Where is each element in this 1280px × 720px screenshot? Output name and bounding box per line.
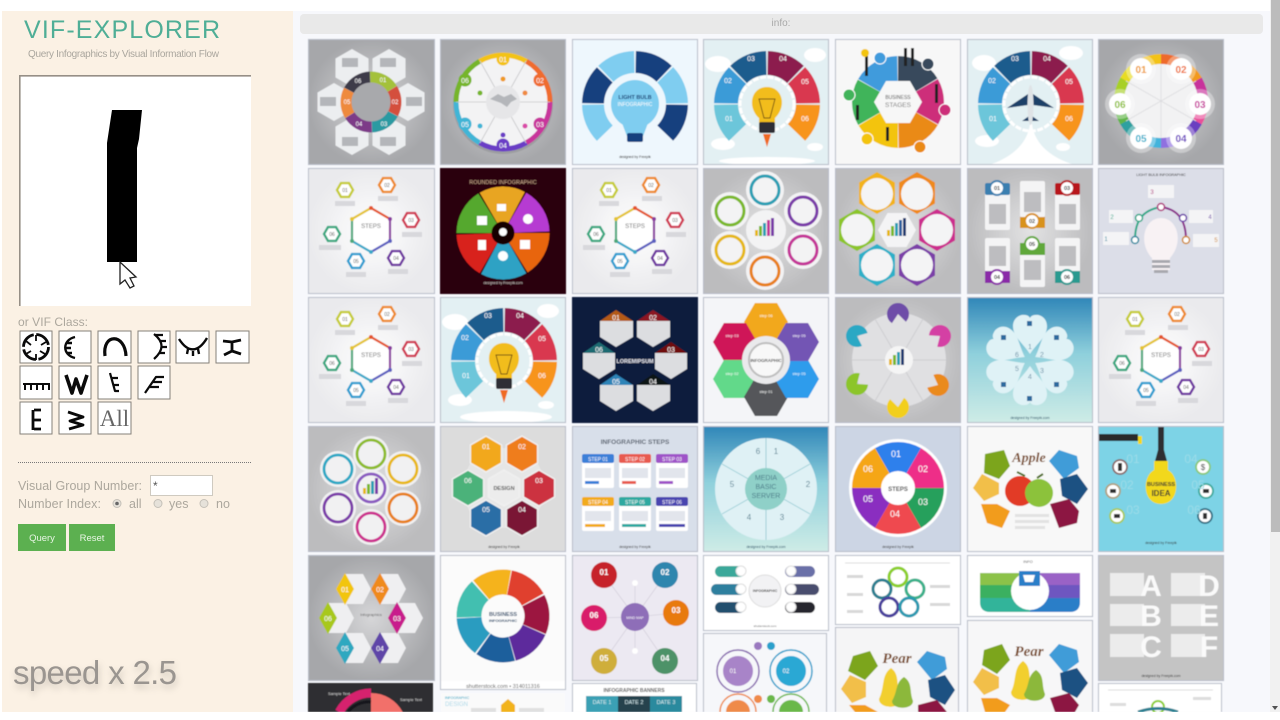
thumbnail: steps hexagon D: 03 xyxy=(1198,347,1204,353)
thumbnail: rainbow wheel xyxy=(1098,38,1224,166)
thumbnail: business idea: 05 xyxy=(1191,478,1205,492)
thumbnail: shopping cart rounded bars xyxy=(966,554,1094,618)
thumbnail: mind map circles: 03 xyxy=(672,606,681,615)
thumbnail: six-part white wheel: 05 xyxy=(461,122,469,129)
thumbnail: airplane arc xyxy=(966,38,1094,166)
thumbnail: yellow bulb arc: 01 xyxy=(725,116,733,123)
thumbnail: infographic banners: DATE 3 xyxy=(657,700,675,706)
thumbnail: rounded infographic dark wheel: ROUNDED INFOGRAPHIC xyxy=(469,180,537,186)
thumbnail: steps hexagon C: 06 xyxy=(329,361,335,367)
thumbnail: light bulb in blue: designed by Freepik xyxy=(619,155,651,159)
thumbnail: pear infographic B: Pear xyxy=(1014,644,1044,660)
thumbnail: infographic banners: INFOGRAPHIC BANNERS xyxy=(603,688,665,694)
title: VIF-EXPLORER xyxy=(24,16,220,44)
thumbnail: business stages pinwheel xyxy=(834,38,962,166)
thumbnail: colored hexagons around circle: step 02 xyxy=(725,371,739,376)
thumbnail: flower of six petals: 6 xyxy=(1015,352,1019,359)
thumbnail: infographic banners xyxy=(572,682,698,712)
form: number index radios: no xyxy=(216,497,230,511)
thumbnail: mind map circles: 05 xyxy=(600,654,609,663)
thumbnail: A to F letters: F xyxy=(1200,631,1218,664)
thumbnail: rocket bulb arc: 03 xyxy=(484,313,492,320)
thumbnail: design hexagons: DESIGN xyxy=(493,486,515,492)
thumbnail: steps hexagon C: 05 xyxy=(353,388,359,394)
thumbnail: colored hexagons around circle: step 01 xyxy=(759,389,773,394)
thumbnail: lorem ipsum dark hexagons: LOREMIPSUM xyxy=(616,359,654,365)
thumbnail: steps hexagon D: 04 xyxy=(1183,385,1189,391)
thumbnail: flower of six petals: 1 xyxy=(1028,344,1032,351)
VIF class glyphs xyxy=(23,334,241,430)
Reset button xyxy=(69,524,115,551)
thumbnail: steps hexagon A: 02 xyxy=(384,183,390,189)
thumbnail: rocket bulb arc: 02 xyxy=(461,335,469,342)
thumbnail: diamond hex tags: 03 xyxy=(393,616,401,623)
thumbnail: rocket bulb arc xyxy=(440,296,566,424)
thumbnail: steps hexagon D: 02 xyxy=(1174,312,1180,318)
thumbnail: steps hexagon D: 06 xyxy=(1119,361,1125,367)
thumbnail: rounded infographic dark wheel: designed by Freepik.com xyxy=(483,281,523,285)
thumbnail: pills with center disc: INFOGRAPHIC xyxy=(753,589,778,593)
thumbnail: rainbow wheel: 01 xyxy=(1135,65,1147,76)
thumbnail: design hexagons: 06 xyxy=(464,478,472,485)
thumbnail: colored hexagons around circle xyxy=(702,296,830,424)
thumbnail: airplane arc: 03 xyxy=(1011,56,1019,63)
thumbnail: A to F letters: C xyxy=(1140,631,1162,664)
thumbnail: steps hexagon B: 04 xyxy=(657,256,663,262)
thumbnail: apple infographic: Apple xyxy=(1011,451,1046,466)
thumbnail: diamond hex tags: 02 xyxy=(376,587,384,594)
thumbnail: business infographic ring: shutterstock.com • 314011316 xyxy=(466,684,540,690)
thumbnail: steps hexagon A: STEPS xyxy=(361,224,381,230)
speed caption: speed x 2.5 xyxy=(14,658,178,695)
thumbnail: six paper cards: 05 xyxy=(1029,242,1035,248)
thumbnail: design hexagons: designed by Freepik xyxy=(488,545,520,549)
thumbnail: diamond hex tags xyxy=(308,554,436,682)
thumbnail: six paper cards xyxy=(966,168,1094,294)
thumbnail: rings slide xyxy=(1098,683,1222,718)
subtitle: Query Infographics by Visual Information Flow xyxy=(28,49,220,60)
thumbnail: infographic design xyxy=(444,696,544,712)
thumbnail: six colour pie steps: 04 xyxy=(890,509,900,519)
thumbnail: media basic server: 5 xyxy=(730,480,735,489)
thumbnail: diamond hex tags: Infographics xyxy=(360,612,382,617)
thumbnail: steps hexagon B: 01 xyxy=(606,188,612,194)
thumbnail: light bulb in blue xyxy=(572,38,698,166)
thumbnail: mind map circles: 02 xyxy=(661,568,670,577)
thumbnail: A to F letters: D xyxy=(1198,570,1220,603)
form: number index radios: yes xyxy=(169,497,188,511)
thumbnail: lorem ipsum dark hexagons: 02 xyxy=(649,315,657,322)
thumbnail: hexagon ring: 01 xyxy=(380,78,387,84)
thumbnail: steps hexagon C: 02 xyxy=(384,312,390,318)
thumbnail: diamond hex tags: 04 xyxy=(376,646,384,653)
thumbnail: colored hexagons around circle: step 06 xyxy=(759,313,773,318)
thumbnail: lorem ipsum dark hexagons: 05 xyxy=(612,379,620,386)
thumbnail: rainbow wheel: 02 xyxy=(1175,65,1187,76)
thumbnail: six paper cards: 02 xyxy=(1029,219,1035,225)
thumbnail: media basic server: 2 xyxy=(806,480,811,489)
thumbnail: pear infographic B xyxy=(967,620,1093,720)
thumbnail: yellow bulb arc: 06 xyxy=(801,116,809,123)
divider xyxy=(18,462,252,464)
thumbnail: diamond hex tags: 06 xyxy=(324,616,332,623)
thumbnail: business idea xyxy=(1098,426,1224,552)
thumbnail: light bulb in blue: LIGHT BULB xyxy=(618,95,652,101)
thumbnail: business idea: 06 xyxy=(1187,503,1201,517)
thumbnail: white light bulb: LIGHT BULB INFOGRAPHIC xyxy=(1136,173,1186,177)
thumbnail: steps hexagon A: 04 xyxy=(393,256,399,262)
Query button xyxy=(18,524,66,551)
thumbnail: yellow bulb arc: 02 xyxy=(724,78,732,85)
thumbnail grid xyxy=(308,38,1224,719)
thumbnail: business idea: 01 xyxy=(1126,452,1140,466)
thumbnail: white light bulb: 2 xyxy=(1110,215,1114,221)
thumbnail: colored hexagons around circle: step 05 xyxy=(792,371,806,376)
thumbnail: dark half circle: Sample Text xyxy=(328,691,351,696)
thumbnail: six colour pie steps: designed by Freepik xyxy=(882,545,914,549)
thumbnail: steps hexagon A: 03 xyxy=(408,218,414,224)
thumbnail: colored hexagons around circle: INFOGRAPHIC xyxy=(750,358,783,363)
thumbnail: hexagons with chart xyxy=(834,168,962,294)
thumbnail: design hexagons xyxy=(440,426,566,552)
thumbnail: apple infographic xyxy=(966,426,1094,552)
thumbnail: mind map circles: 01 xyxy=(600,568,609,577)
thumbnail: steps hexagon A xyxy=(308,168,436,294)
form: number index radios: Number Index: xyxy=(18,497,101,511)
thumbnail: business infographic ring: BUSINESS xyxy=(489,612,517,618)
thumbnail: six paper cards: 03 xyxy=(1064,186,1070,192)
thumbnail: hexagon ring: 04 xyxy=(356,122,363,128)
thumbnail: steps hexagon C xyxy=(308,296,436,424)
thumbnail: media basic server: 1 xyxy=(774,447,779,456)
thumbnail: white light bulb: 1 xyxy=(1104,237,1108,243)
Query button: Query xyxy=(29,533,55,544)
thumbnail: six-part white wheel: 06 xyxy=(461,78,469,85)
thumbnail: business stages pinwheel: STAGES xyxy=(885,102,912,109)
icon: scroll down arrow xyxy=(1272,706,1278,710)
thumbnail: rocket bulb arc: 04 xyxy=(516,313,524,320)
sketch canvas xyxy=(19,75,251,306)
thumbnail: design hexagons: 01 xyxy=(482,444,490,451)
thumbnail: business infographic ring xyxy=(440,554,566,690)
thumbnail: lorem ipsum dark hexagons: 04 xyxy=(649,379,657,386)
thumbnail: mind map circles: 04 xyxy=(661,654,670,663)
thumbnail: hexagon ring: 03 xyxy=(381,122,388,128)
thumbnail: infographic design: DESIGN xyxy=(445,702,468,708)
thumbnail: rocket bulb arc: 06 xyxy=(538,373,546,380)
thumbnail: pills with center disc: shutterstock.com xyxy=(754,624,777,628)
form: visual group number: * xyxy=(153,479,158,493)
thumbnail: airplane arc: 04 xyxy=(1043,56,1051,63)
thumbnail: six colour pie steps: 03 xyxy=(918,497,928,507)
thumbnail: business idea: IDEA xyxy=(1151,489,1171,498)
thumbnail: infographic banners: DATE 1 xyxy=(593,700,611,706)
thumbnail: six-part white wheel: 02 xyxy=(536,78,544,85)
thumbnail: rainbow wheel: 05 xyxy=(1135,134,1147,145)
thumbnail: mind map circles xyxy=(572,554,698,682)
thumbnail: airplane arc: 01 xyxy=(989,116,997,123)
thumbnail: steps hexagon B: STEPS xyxy=(625,224,645,230)
thumbnail: six paper cards: 04 xyxy=(994,275,1001,281)
thumbnail: business idea: $ xyxy=(1201,463,1206,472)
thumbnail: A to F letters: A xyxy=(1140,570,1162,603)
thumbnail: business idea: 03 xyxy=(1126,503,1140,517)
thumbnail: steps hexagon B: 03 xyxy=(672,218,678,224)
thumbnail: white light bulb: 3 xyxy=(1150,190,1154,196)
form: visual group number xyxy=(18,476,212,496)
thumbnail: steps hexagon D: 05 xyxy=(1143,388,1149,394)
thumbnail: flower of six petals xyxy=(966,296,1094,424)
thumbnail: infographic steps cards: STEP 04 xyxy=(588,500,608,506)
info bar xyxy=(300,14,1263,34)
info bar: info: xyxy=(772,18,790,29)
thumbnail: rainbow wheel: 04 xyxy=(1175,134,1187,145)
thumbnail: steps hexagon D xyxy=(1098,296,1224,424)
thumbnail: media basic server xyxy=(702,426,830,552)
thumbnail: design hexagons: 03 xyxy=(535,478,543,485)
thumbnail: six rings with chart xyxy=(702,168,830,294)
thumbnail: seven rings xyxy=(308,426,436,552)
thumbnail: infographic steps cards: designed by Freepik xyxy=(619,545,651,549)
thumbnail: A to F letters: E xyxy=(1199,600,1219,633)
thumbnail: infographic steps cards: STEP 02 xyxy=(625,457,645,463)
thumbnail: light bulb in blue: INFOGRAPHIC xyxy=(618,102,653,108)
thumbnail: six colour pie steps: 06 xyxy=(863,464,873,474)
thumbnail: business idea: BUSINESS xyxy=(1147,482,1175,488)
thumbnail: six paper cards: 06 xyxy=(1064,275,1070,281)
thumbnail: A to F letters xyxy=(1098,554,1224,682)
thumbnail: linked circles: 02 xyxy=(783,669,790,675)
thumbnail: mind map circles: 06 xyxy=(590,611,599,620)
speed caption: speed x 2.5 xyxy=(13,654,177,691)
thumbnail: A to F letters: designed by Freepik.com xyxy=(1141,674,1181,678)
thumbnail: colored hexagons around circle: step 03 xyxy=(725,333,739,338)
thumbnail: six-part white wheel: 01 xyxy=(499,57,507,64)
All button label: All xyxy=(100,406,129,431)
thumbnail: hexagon ring: 05 xyxy=(344,100,351,106)
thumbnail: pills with center disc xyxy=(702,554,830,632)
thumbnail: linked circles: 01 xyxy=(730,669,737,675)
thumbnail: steps hexagon A: 05 xyxy=(353,259,359,265)
thumbnail: colored hexagons around circle: step 05 xyxy=(792,333,806,338)
thumbnail: steps hexagon D: 01 xyxy=(1132,317,1138,323)
thumbnail: steps hexagon C: 01 xyxy=(342,317,348,323)
thumbnail: lorem ipsum dark hexagons: 06 xyxy=(595,347,603,354)
thumbnail: design hexagons: 04 xyxy=(518,507,526,514)
thumbnail: pear infographic A xyxy=(834,626,960,712)
thumbnail: infographic steps cards: STEP 03 xyxy=(662,457,682,463)
thumbnail: six-part white wheel: 04 xyxy=(499,143,507,150)
thumbnail: media basic server: designed by Freepik.com xyxy=(746,545,786,549)
thumbnail: infographic steps cards: STEP 06 xyxy=(662,500,682,506)
thumbnail: steps hexagon B: 02 xyxy=(648,183,654,189)
thumbnail: steps hexagon B xyxy=(572,168,698,294)
thumbnail: lorem ipsum dark hexagons: 01 xyxy=(612,315,620,322)
thumbnail: hexagon ring xyxy=(308,38,436,166)
thumbnail: infographic steps cards: INFOGRAPHIC STEPS xyxy=(601,439,670,446)
thumbnail: linked circles xyxy=(702,632,828,712)
label: VIF class: or VIF Class: xyxy=(18,315,88,329)
thumbnail: infographic steps cards: STEP 01 xyxy=(588,457,608,463)
thumbnail: design hexagons: 05 xyxy=(482,507,490,514)
thumbnail: six colour pie steps: 01 xyxy=(891,449,901,459)
thumbnail: steps hexagon A: 01 xyxy=(342,188,348,194)
thumbnail: rocket bulb arc: 01 xyxy=(462,373,470,380)
thumbnail: six colour pie steps: 05 xyxy=(863,494,873,504)
thumbnail: yellow bulb arc xyxy=(702,38,830,166)
thumbnail: steps hexagon C: 03 xyxy=(408,347,414,353)
thumbnail: white light bulb: 5 xyxy=(1214,238,1218,244)
thumbnail: rocket bulb arc: 05 xyxy=(538,336,546,343)
thumbnail: design hexagons: 02 xyxy=(518,444,526,451)
thumbnail: pear infographic A: Pear xyxy=(882,651,912,667)
thumbnail: rainbow wheel: 03 xyxy=(1194,100,1206,111)
thumbnail: six colour pie steps: STEPS xyxy=(888,487,908,493)
thumbnail: steps hexagon B: 06 xyxy=(593,232,599,238)
thumbnail: infographic steps cards xyxy=(572,426,698,552)
thumbnail: infographic banners: DATE 2 xyxy=(625,700,643,706)
thumbnail: infographic design: INFOGRAPHIC xyxy=(445,696,470,700)
thumbnail: dark half circle xyxy=(307,682,434,712)
thumbnail: airplane arc: 06 xyxy=(1065,116,1073,123)
thumbnail: six paper cards: 01 xyxy=(994,186,1000,192)
thumbnail: hexagon ring: 02 xyxy=(392,100,399,106)
thumbnail: airplane arc: 05 xyxy=(1065,79,1073,86)
thumbnail: flower of six petals: 3 xyxy=(1040,368,1044,375)
thumbnail: steps hexagon B: 05 xyxy=(617,259,623,265)
thumbnail: six-part white wheel: 03 xyxy=(536,122,544,129)
form: number index radios xyxy=(18,497,230,511)
thumbnail: rounded infographic dark wheel xyxy=(439,167,567,295)
thumbnail: steps hexagon C: 04 xyxy=(393,385,399,391)
VIF class buttons xyxy=(20,331,249,434)
thumbnail: white light bulb: 4 xyxy=(1208,215,1212,221)
thumbnail: business idea: 02 xyxy=(1120,478,1134,492)
thumbnail: yellow bulb arc: 04 xyxy=(779,56,787,63)
thumbnail: media basic server: 6 xyxy=(756,447,761,456)
thumbnail: infographic steps cards: STEP 05 xyxy=(625,500,645,506)
thumbnail: flower of six petals: 4 xyxy=(1028,374,1032,381)
thumbnail: media basic server: 3 xyxy=(780,513,785,522)
thumbnail: flower of six petals: designed by Freepik.com xyxy=(1010,416,1050,420)
thumbnail: business idea: 04 xyxy=(1184,452,1198,466)
thumbnail: yellow bulb arc: 05 xyxy=(801,79,809,86)
thumbnail: lorem ipsum dark hexagons: 03 xyxy=(667,347,675,354)
thumbnail: diamond hex tags: 05 xyxy=(341,646,349,653)
thumbnail: five linked rings xyxy=(834,554,962,626)
thumbnail: steps hexagon C: STEPS xyxy=(361,353,381,359)
form: visual group number: Visual Group Number: xyxy=(18,479,142,493)
thumbnail: business idea: designed by Freepik xyxy=(1145,541,1177,545)
thumbnail: dark half circle: Sample Text xyxy=(400,697,423,702)
thumbnail: business infographic ring: INFOGRAPHIC xyxy=(489,618,517,623)
thumbnail: shopping cart rounded bars: INFO xyxy=(1023,559,1033,564)
Reset button: Reset xyxy=(80,533,105,544)
thumbnail: diamond hex tags: 01 xyxy=(341,587,349,594)
thumbnail: steps hexagon A: 06 xyxy=(329,232,335,238)
icon: mouse cursor xyxy=(120,262,136,288)
thumbnail: A to F letters: B xyxy=(1140,600,1162,633)
thumbnail: gray wheel with pie markers xyxy=(834,296,962,424)
sidebar panel xyxy=(2,11,293,712)
thumbnail: six-part white wheel xyxy=(440,38,566,166)
thumbnail: media basic server: 4 xyxy=(747,513,752,522)
thumbnail: six colour pie steps xyxy=(834,426,962,552)
thumbnail: steps hexagon D: STEPS xyxy=(1151,353,1171,359)
thumbnail: lorem ipsum dark hexagons xyxy=(571,296,699,424)
thumbnail: media basic server: MEDIA xyxy=(755,475,777,482)
thumbnail: flower of six petals: 2 xyxy=(1040,352,1044,359)
thumbnail: rainbow wheel: 06 xyxy=(1114,100,1126,111)
thumbnail: flower of six petals: 5 xyxy=(1015,366,1019,373)
thumbnail: mind map circles: MIND MAP xyxy=(626,616,644,620)
thumbnail: airplane arc: 02 xyxy=(988,78,996,85)
thumbnail: business stages pinwheel: BUSINESS xyxy=(885,95,911,101)
thumbnail: white light bulb xyxy=(1098,168,1224,294)
form: number index radios: all xyxy=(129,497,142,511)
thumbnail: hexagon ring: 06 xyxy=(355,79,362,85)
thumbnail: yellow bulb arc: 03 xyxy=(747,56,755,63)
thumbnail: media basic server: SERVER xyxy=(752,493,780,500)
scrollbar xyxy=(1270,0,1280,712)
thumbnail: six colour pie steps: 02 xyxy=(918,464,928,474)
thumbnail: media basic server: BASIC xyxy=(755,484,777,491)
